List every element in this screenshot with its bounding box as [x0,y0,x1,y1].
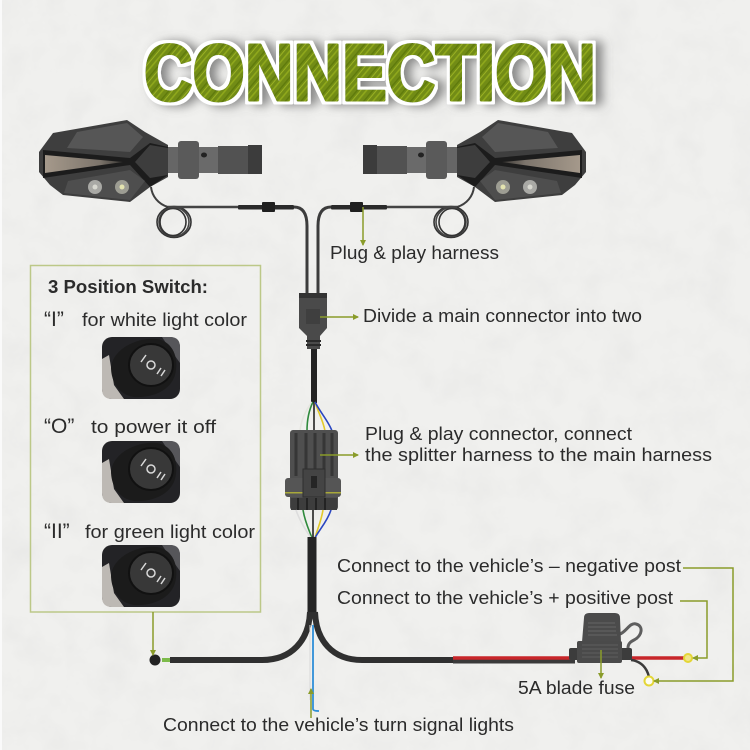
arrow: plug and play connector [320,454,358,456]
left mirror light with coiled cable [39,120,262,238]
position I label: “I” [44,308,64,331]
label: plug and play connector: the splitter harness to the main harness [365,445,712,465]
blue signal wire [310,625,319,711]
title: CONNECTION [144,28,596,117]
arrow: positive post callout [680,601,707,658]
arrow: splitter [320,316,358,318]
black negative pigtail with ring terminal [631,660,654,686]
main harness split wires [150,537,685,666]
arrow: blade fuse [600,650,602,678]
position II label: “II” [44,520,70,543]
red positive ring terminal [684,654,692,662]
splitter connector [299,293,327,349]
arrow: plug and play harness [362,207,364,245]
label: turn signal lights: Connect to the vehicle’s turn signal lights [163,715,514,735]
label: plug and play harness: Plug & play harness [330,243,499,263]
label: plug and play connector: Plug & play connector, connect [365,424,632,444]
position II label: for green light color [85,522,255,542]
right mirror light with coiled cable [363,120,586,238]
arrow: switch to button [152,612,154,655]
switch photo: position I [102,337,180,399]
label: plug and play connector [365,424,712,465]
switch photo: position O [102,441,180,503]
position O label: “O” [44,415,74,438]
label: divide connector: Divide a main connector into two [363,306,642,326]
switch photo: position II [102,545,180,607]
label: blade fuse: 5A blade fuse [518,678,635,698]
splitter harness cables and connectors [238,202,387,296]
position O label: to power it off [91,417,217,437]
panel: 3 position switch [30,266,260,612]
main cable to connector [311,349,317,403]
position I label: for white light color [82,310,247,330]
plug and play connector [285,430,341,510]
label: positive post: Connect to the vehicle’s + positive post [337,588,673,608]
switch panel heading: 3 Position Switch: [48,277,208,297]
coloured wires below connector [296,510,331,538]
label: negative post: Connect to the vehicle’s – negative post [337,556,681,576]
inline blade fuse [569,613,641,663]
arrow: turn signal wire [310,689,312,718]
arrow: negative post callout [654,568,733,681]
coloured wires above connector [300,402,332,431]
